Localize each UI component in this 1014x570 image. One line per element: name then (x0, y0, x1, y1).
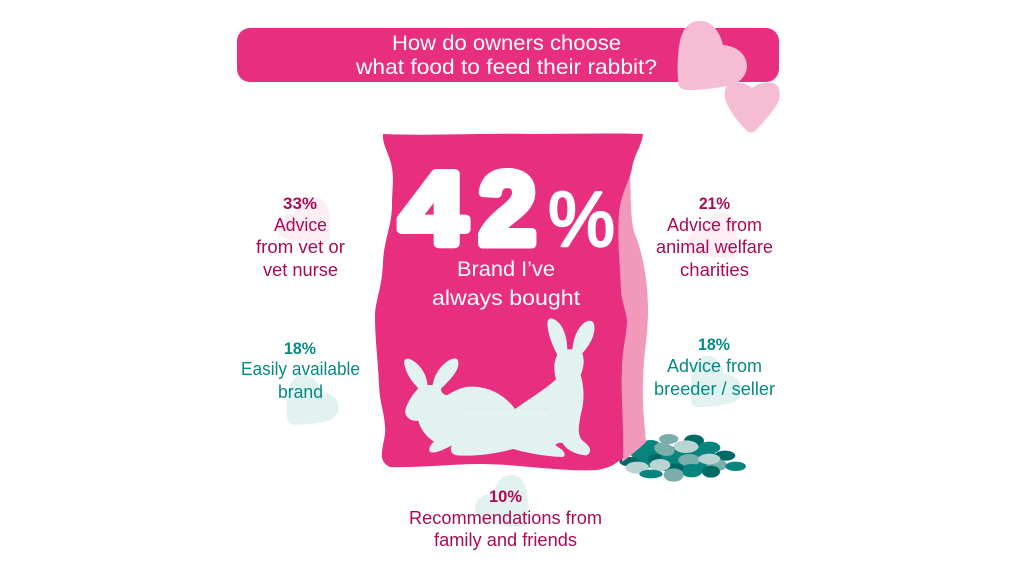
icon: pale teal heart (475, 475, 528, 527)
stat text: 21% (699, 194, 730, 213)
stat text (654, 335, 775, 399)
stat text: brand (278, 381, 323, 402)
title banner (237, 21, 780, 132)
icon: food pellets pile (619, 434, 746, 482)
label: brand I've always bought: Brand I’ve (457, 257, 555, 281)
stat: 33% advice from vet or vet nurse (256, 194, 345, 280)
stat text (241, 339, 360, 402)
icon: pale pink heart (687, 212, 737, 258)
stat text: 18% (284, 339, 316, 358)
title text: what food to feed their rabbit? (355, 55, 657, 79)
stat text: 10% (489, 487, 522, 506)
big number 42%: 2 (479, 152, 536, 266)
stat text (256, 194, 345, 280)
stat text: Advice (274, 214, 327, 235)
stat text (656, 194, 773, 280)
stat text: charities (680, 259, 749, 280)
stat text: Recommendations from (409, 507, 602, 528)
bag side panel (618, 172, 648, 462)
stat text: Easily available (241, 358, 360, 379)
bag front (375, 134, 643, 470)
big number 42% (400, 152, 615, 266)
stat text: animal welfare (656, 236, 773, 257)
stat: 10% recommendations from family and friends (409, 475, 602, 550)
stat: 18% advice from breeder / seller (654, 335, 775, 407)
stat text: Advice from (667, 214, 762, 235)
label: brand I've always bought (432, 257, 580, 310)
big number 42%: % (548, 175, 615, 263)
food bag (375, 134, 648, 470)
stat: 18% easily available brand (241, 339, 360, 425)
icon: small pink heart (725, 82, 780, 132)
stat text: 33% (283, 194, 317, 213)
icon: pale pink heart (277, 197, 330, 243)
icon: two rabbits silhouette (404, 318, 594, 457)
title text (355, 31, 657, 79)
stat text: vet nurse (263, 259, 338, 280)
stat text: family and friends (434, 529, 577, 550)
label: brand I've always bought: always bought (432, 286, 580, 310)
stat text: breeder / seller (654, 378, 775, 399)
stat text: 18% (698, 335, 730, 354)
icon: large pink heart (678, 21, 747, 90)
icon: pale teal heart (287, 375, 339, 425)
stat text (409, 487, 602, 550)
title text: How do owners choose (392, 31, 621, 55)
stat text: from vet or (256, 236, 345, 257)
banner background (237, 28, 779, 82)
big number 42%: 4 (400, 152, 466, 266)
icon: pale teal heart (691, 356, 742, 407)
stat: 21% advice from animal welfare charities (656, 194, 773, 280)
stat text: Advice from (667, 355, 762, 376)
